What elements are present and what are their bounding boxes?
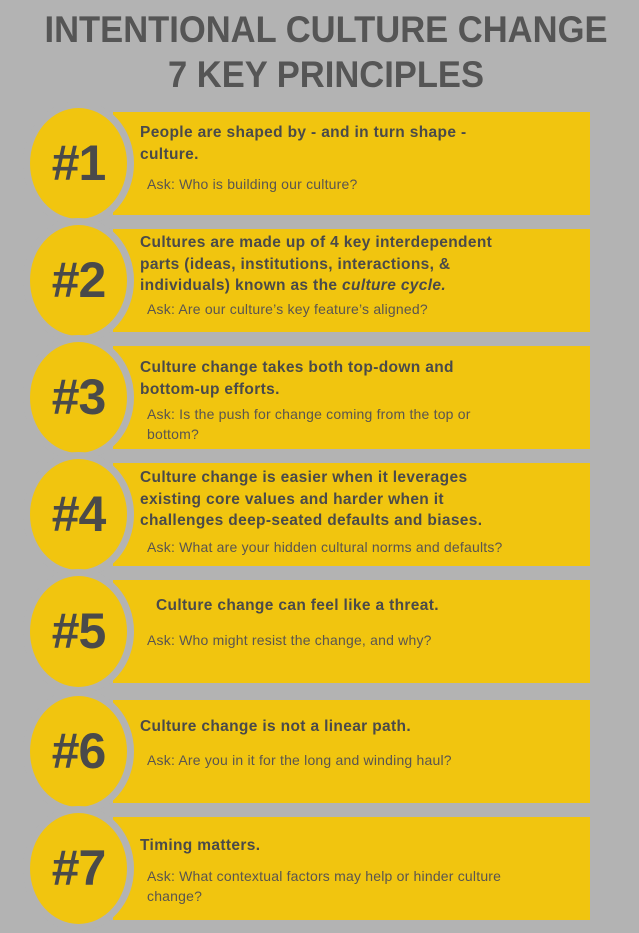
heading 1: culture.: [140, 146, 199, 162]
panel: principle 6: [30, 696, 590, 806]
heading 3: bottom-up efforts.: [140, 380, 280, 398]
heading 1: [140, 124, 466, 162]
title: [44, 9, 608, 95]
icon: number badge 4: #4: [52, 486, 105, 542]
heading 6: Culture change is not a linear path.: [140, 718, 411, 735]
heading 2: individuals) known as the culture cycle.: [140, 277, 446, 294]
ask 4: Ask: What are your hidden cultural norms and defaults?: [147, 539, 503, 555]
icon: number badge 7: [30, 813, 127, 924]
heading 7: Timing matters.: [140, 837, 260, 854]
ask 1: Ask: Who is building our culture?: [147, 176, 357, 192]
title: INTENTIONAL CULTURE CHANGE: [44, 9, 608, 50]
icon: number badge 1: [30, 108, 127, 219]
ask 7: Ask: What contextual factors may help or hinder culture: [147, 868, 501, 884]
ask 3: bottom?: [147, 426, 199, 442]
ask 7: change?: [147, 888, 202, 904]
icon: number badge 6: #6: [52, 723, 105, 779]
heading 3: [140, 359, 454, 398]
ask 6: Ask: Are you in it for the long and winding haul?: [147, 752, 452, 768]
heading 2: parts (ideas, institutions, interactions, &: [140, 256, 450, 272]
panel: principle 1: [30, 108, 590, 218]
icon: number badge 2: #2: [52, 252, 105, 308]
heading 4: existing core values and harder when it: [140, 490, 444, 508]
icon: number badge 4: [30, 459, 127, 570]
ask 3: [147, 406, 471, 442]
icon: number badge 1: #1: [52, 135, 105, 191]
heading 3: Culture change takes both top-down and: [140, 359, 454, 376]
panel: principle 7: [30, 806, 590, 924]
icon: number badge 2: [30, 225, 127, 336]
heading 1: People are shaped by - and in turn shape -: [140, 124, 466, 141]
heading 4: [140, 469, 482, 529]
icon: number badge 5: [30, 576, 127, 687]
panel: principle 2: [30, 218, 590, 336]
ask 3: Ask: Is the push for change coming from the top or: [147, 406, 471, 422]
ask 2: Ask: Are our culture’s key feature’s aligned?: [147, 301, 428, 317]
heading 4: challenges deep-seated defaults and biases.: [140, 512, 482, 529]
heading 2: [140, 234, 492, 294]
ask 5: Ask: Who might resist the change, and why?: [147, 632, 432, 648]
heading 2: Cultures are made up of 4 key interdependent: [140, 234, 492, 251]
icon: number badge 6: [30, 696, 127, 807]
icon: number badge 3: #3: [52, 369, 105, 425]
icon: number badge 5: #5: [52, 603, 105, 659]
title: 7 KEY PRINCIPLES: [168, 54, 484, 95]
ask 7: [147, 868, 501, 904]
icon: number badge 3: [30, 342, 127, 453]
heading 5: Culture change can feel like a threat.: [156, 597, 439, 614]
panel: principle 3: [30, 335, 590, 452]
heading 4: Culture change is easier when it leverages: [140, 469, 467, 486]
icon: number badge 7: #7: [52, 840, 105, 896]
panel: principle 5: [30, 569, 590, 687]
panel: principle 4: [30, 452, 590, 570]
